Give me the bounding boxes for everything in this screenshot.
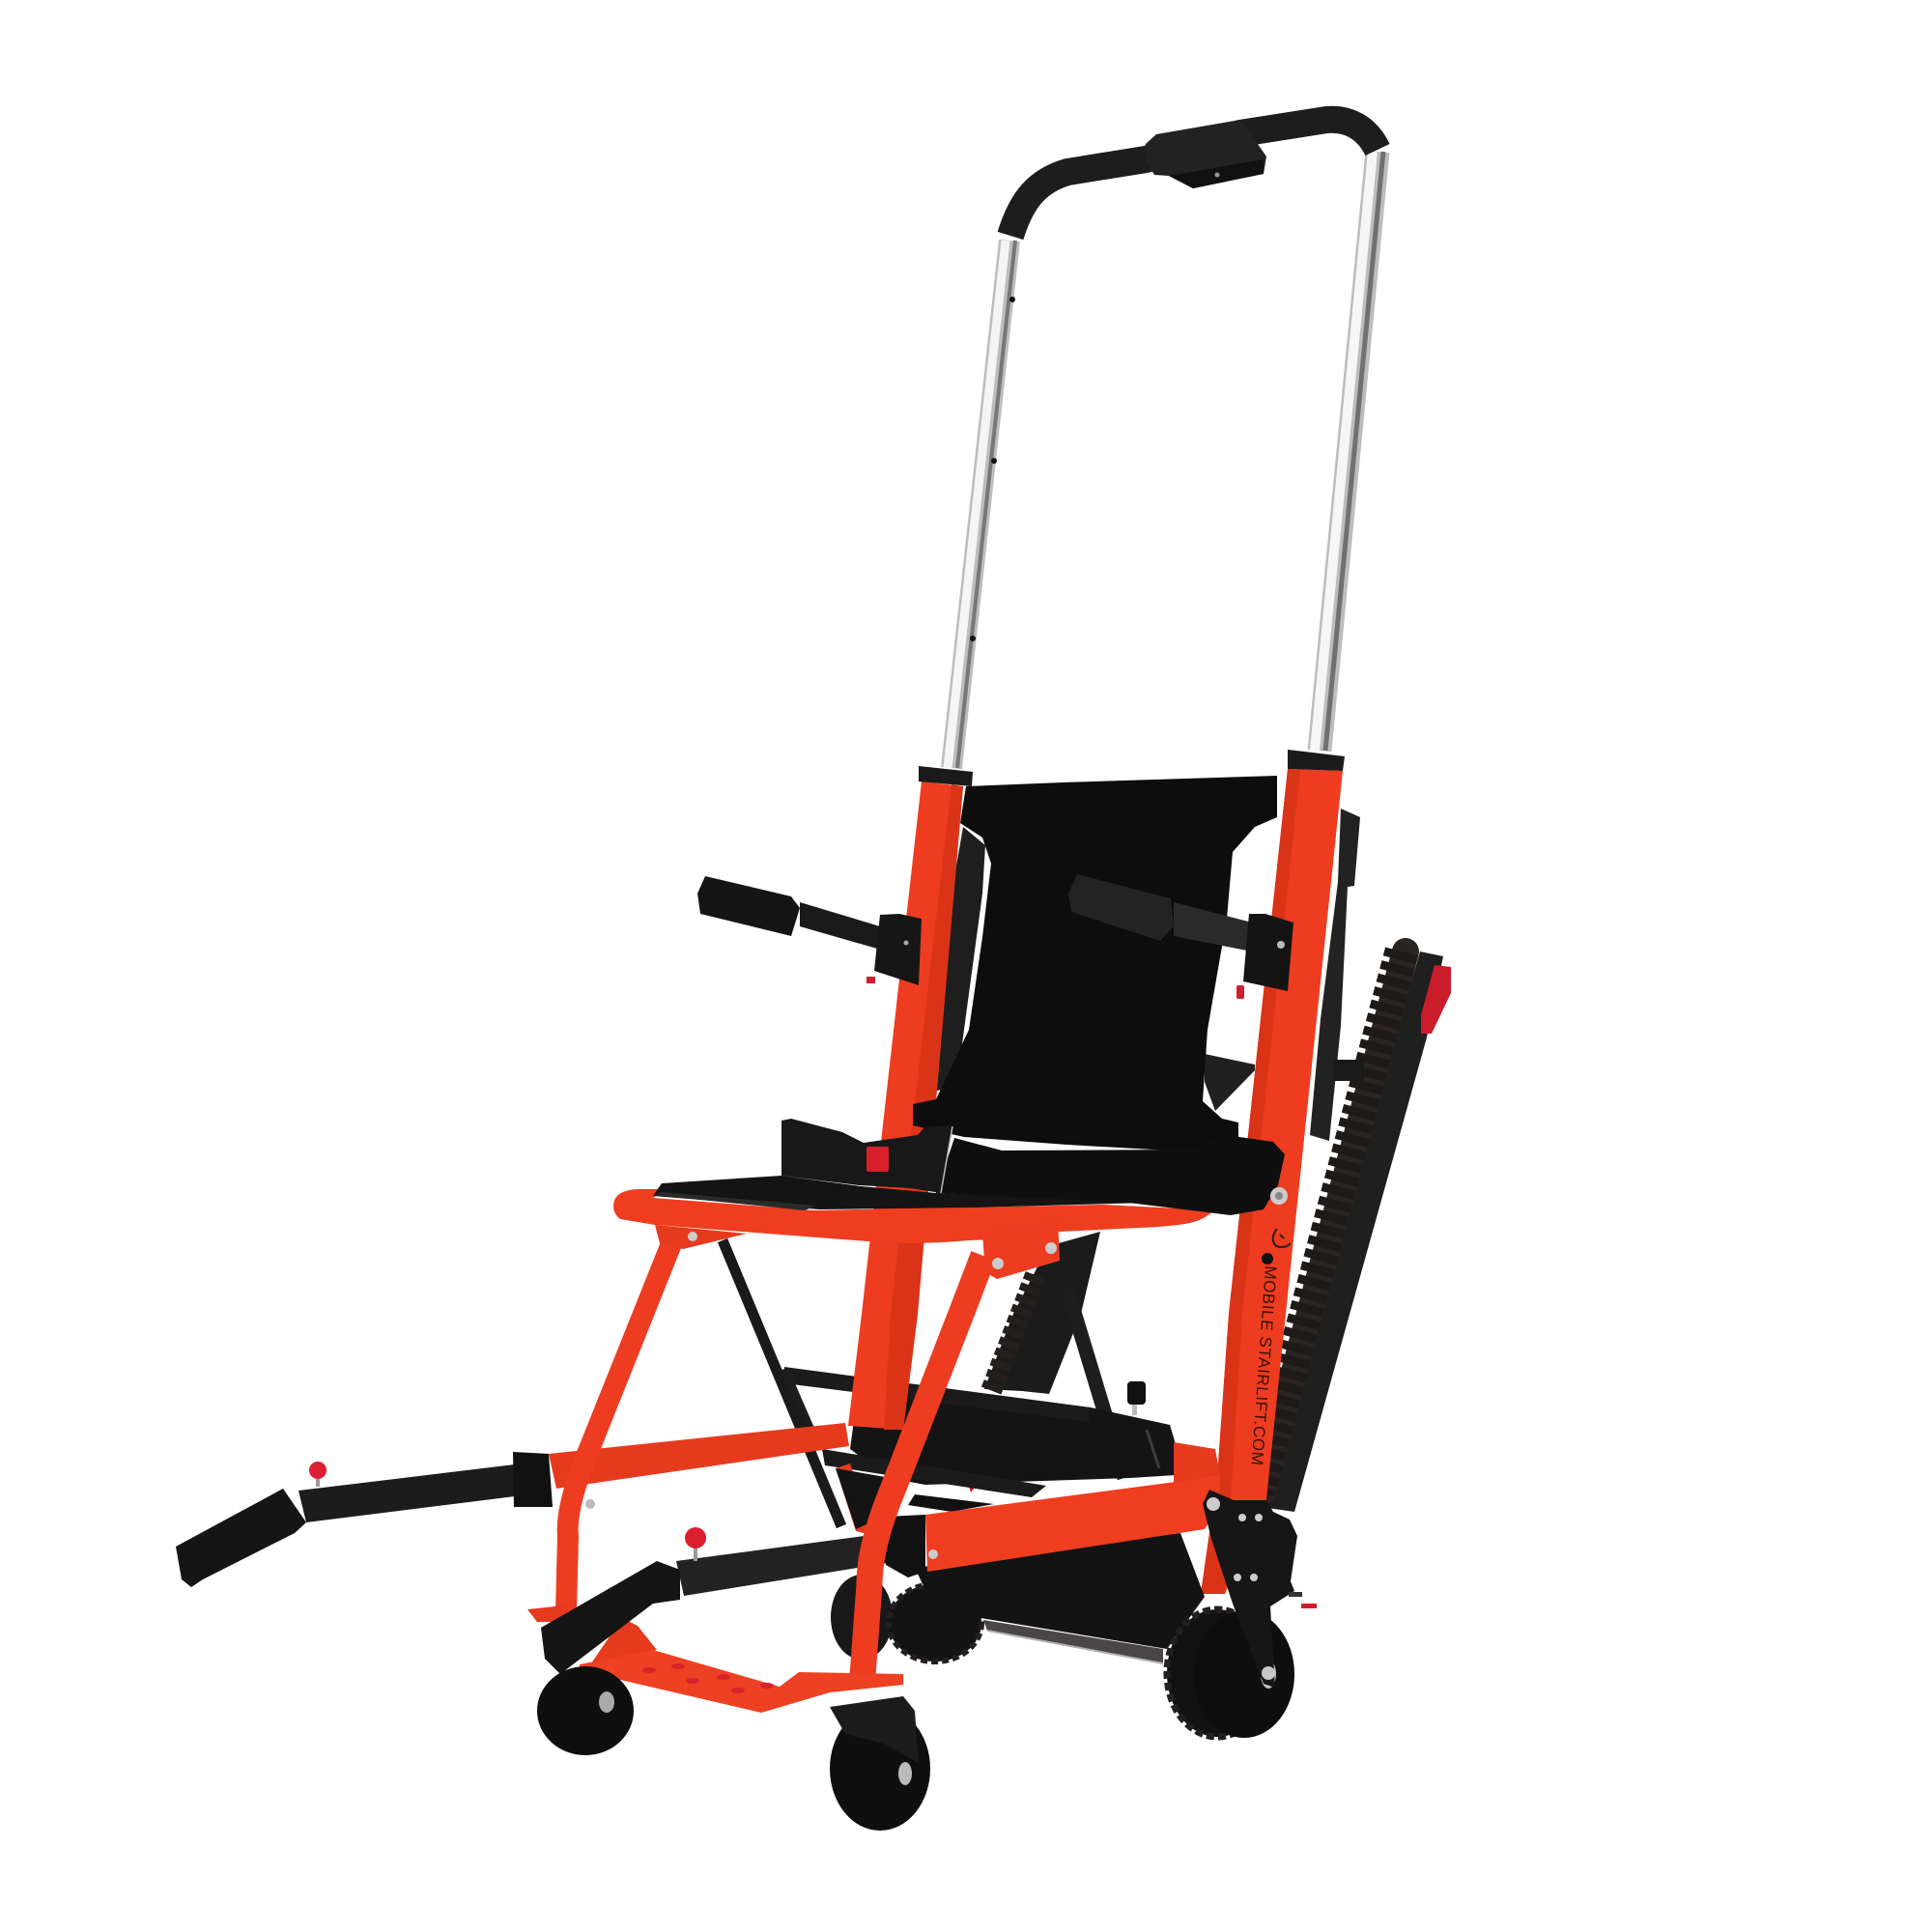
right armrest <box>1068 874 1293 999</box>
front left caster wheel <box>537 1666 634 1755</box>
left upright frame <box>848 781 963 1430</box>
brand logo and dot <box>1262 1229 1291 1264</box>
lower drive housing <box>915 1533 1205 1663</box>
rear small wheel and sprocket <box>831 1575 981 1662</box>
rear back-left crossbar with black extension <box>298 1423 891 1536</box>
left push-out grip <box>176 1489 306 1587</box>
rear back-support post <box>1310 809 1360 1141</box>
seat cushion <box>653 1176 1147 1209</box>
battery case <box>850 1391 1176 1492</box>
brand text on frame: MOBILE STAIRLIFT.COM <box>1248 1265 1280 1466</box>
right red knob <box>685 1527 706 1561</box>
front right push-out grip <box>541 1561 680 1674</box>
left red knob <box>309 1462 327 1487</box>
seat belt band <box>936 1135 1285 1215</box>
rear cross brace <box>1205 1054 1364 1111</box>
red tubular seat rim <box>613 1189 1214 1243</box>
lower black cross bars <box>784 1367 1091 1512</box>
right upright frame <box>1201 769 1343 1594</box>
right crossbar with black extension <box>676 1442 1220 1596</box>
left back-support post <box>932 827 985 1092</box>
front right caster wheel <box>830 1696 930 1831</box>
chrome push handle tubes <box>948 152 1383 768</box>
seat rim mounting brackets <box>655 1220 1060 1279</box>
front right leg <box>863 1256 983 1676</box>
footplate <box>527 1605 903 1713</box>
rear tracked rail <box>1259 952 1443 1512</box>
ignition key <box>1127 1381 1146 1415</box>
black foam grip with centre block <box>1010 120 1378 236</box>
main rear wheel <box>1167 1609 1294 1738</box>
front left leg <box>566 1236 674 1611</box>
seat pivot bolt <box>1270 1187 1288 1205</box>
seat belt buckle <box>781 1119 952 1193</box>
red track cap <box>1421 965 1451 1034</box>
upright end caps <box>919 750 1345 786</box>
inner track and folding braces <box>723 1232 1124 1526</box>
front seat plate <box>653 1192 816 1210</box>
fabric seat back <box>913 776 1277 1154</box>
left armrest <box>697 876 922 985</box>
right frame black bracket <box>1203 1490 1317 1688</box>
